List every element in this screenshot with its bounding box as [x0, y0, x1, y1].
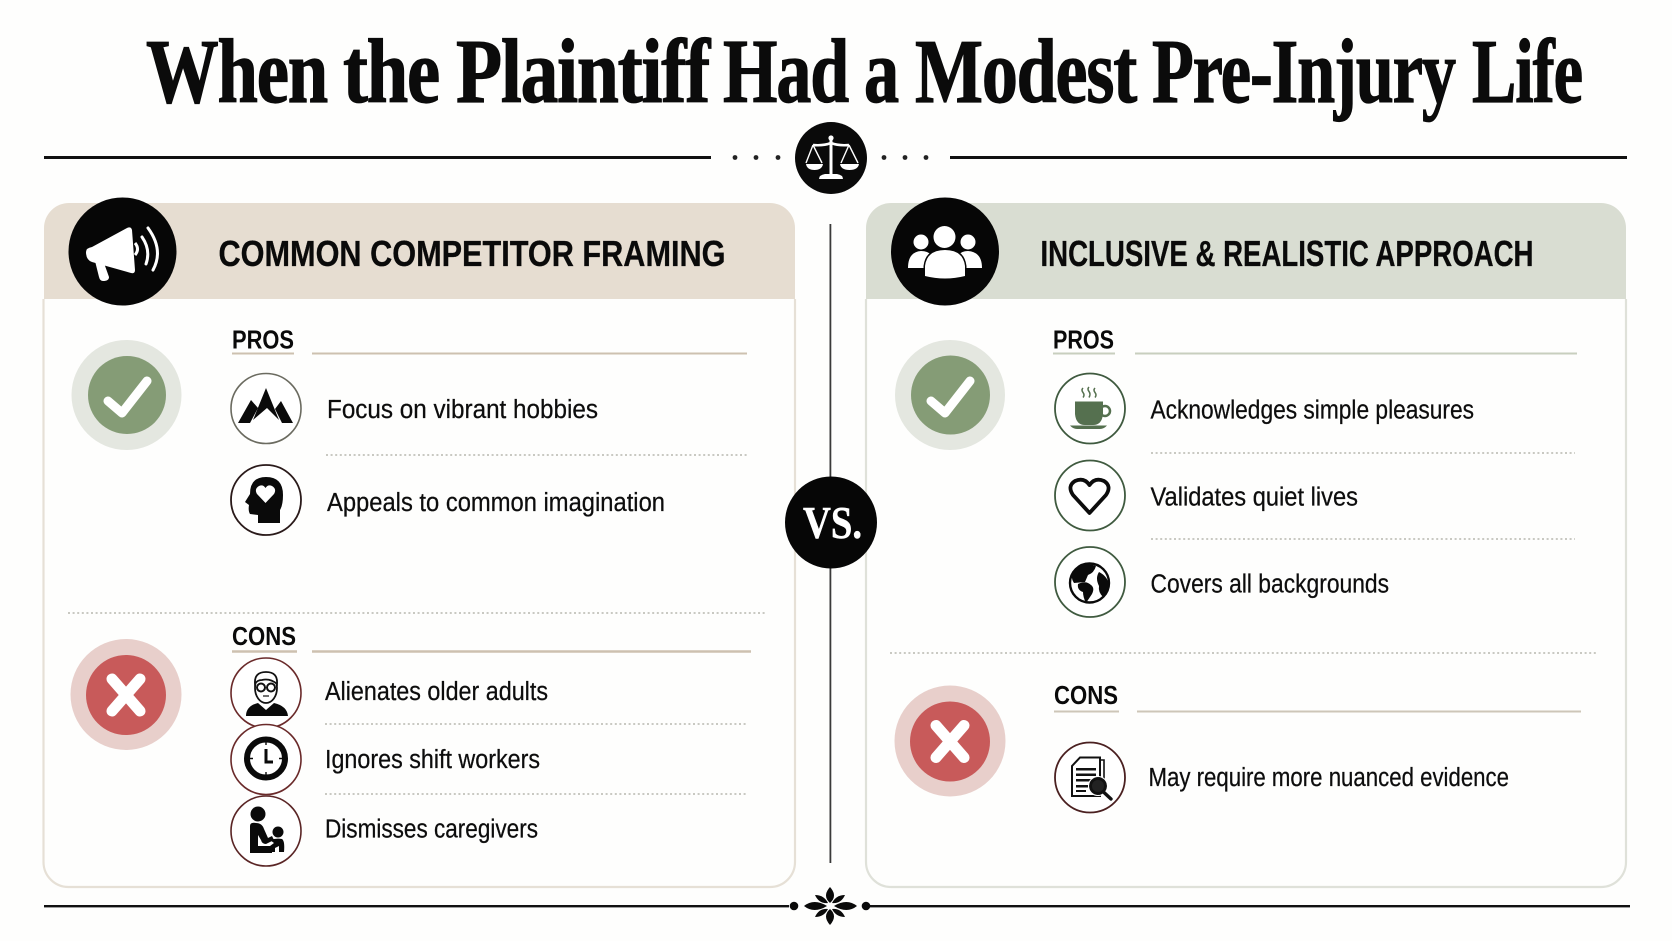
title: Had [723, 21, 849, 122]
title: When [146, 21, 328, 122]
pros label: PROS [1053, 324, 1114, 354]
cons item: dismisses caregivers [231, 796, 538, 866]
vs badge [785, 476, 877, 568]
cons item: may require more nuanced evidence: May require more nuanced evidence [1148, 764, 1509, 792]
pros item: appeals to common imagination: Appeals to common imagination [327, 489, 665, 517]
footer ornament rule [44, 887, 1630, 925]
cons badge: cross [894, 686, 1006, 796]
cons item: dismisses caregivers: Dismisses caregivers [325, 816, 538, 844]
pros item: covers all backgrounds: Covers all backgrounds [1150, 570, 1389, 598]
title: Plaintiff [456, 21, 712, 122]
cons item: ignores shift workers [231, 724, 540, 794]
vs badge: VS. [803, 498, 862, 548]
cons badge: cross [70, 639, 182, 750]
heading: common competitor framing: COMMON COMPETITOR FRAMING [218, 233, 726, 274]
icon: group of people [891, 198, 999, 306]
icon: scales of justice [795, 122, 867, 194]
title: Life [1472, 21, 1582, 122]
center divider line [830, 224, 831, 863]
title: a [864, 21, 899, 122]
pros item: focus on vibrant hobbies [231, 374, 598, 444]
pros badge: check mark [72, 340, 182, 450]
pros item: validates quiet lives: Validates quiet lives [1150, 484, 1358, 512]
title divider with scales emblem [44, 122, 1627, 194]
cons item: alienates older adults: Alienates older adults [325, 678, 548, 706]
cons item: may require more nuanced evidence [1055, 742, 1509, 812]
title: Pre-Injury [1152, 21, 1456, 122]
title: Modest [915, 21, 1137, 122]
cons item: alienates older adults [231, 658, 548, 728]
pros item: focus on vibrant hobbies: Focus on vibrant hobbies [327, 396, 598, 424]
title: the [343, 21, 439, 122]
pros item: acknowledges simple pleasures [1055, 374, 1474, 444]
panel: inclusive and realistic approach [866, 198, 1626, 887]
pros item: covers all backgrounds [1055, 547, 1389, 617]
title [146, 21, 1582, 122]
icon: megaphone [68, 198, 176, 306]
pros label: PROS [232, 324, 294, 354]
cons item: ignores shift workers: Ignores shift workers [325, 746, 540, 774]
cons label: CONS [232, 621, 296, 651]
pros badge: check mark [895, 340, 1005, 450]
heading: inclusive and realistic approach: INCLUSIVE & REALISTIC APPROACH [1040, 233, 1534, 274]
pros item: validates quiet lives [1055, 460, 1358, 530]
pros item: appeals to common imagination [231, 465, 665, 535]
cons label: CONS [1054, 680, 1118, 710]
icon: floral ornament [804, 887, 857, 925]
panel: common competitor framing [44, 198, 795, 887]
pros item: acknowledges simple pleasures: Acknowledges simple pleasures [1150, 396, 1474, 424]
